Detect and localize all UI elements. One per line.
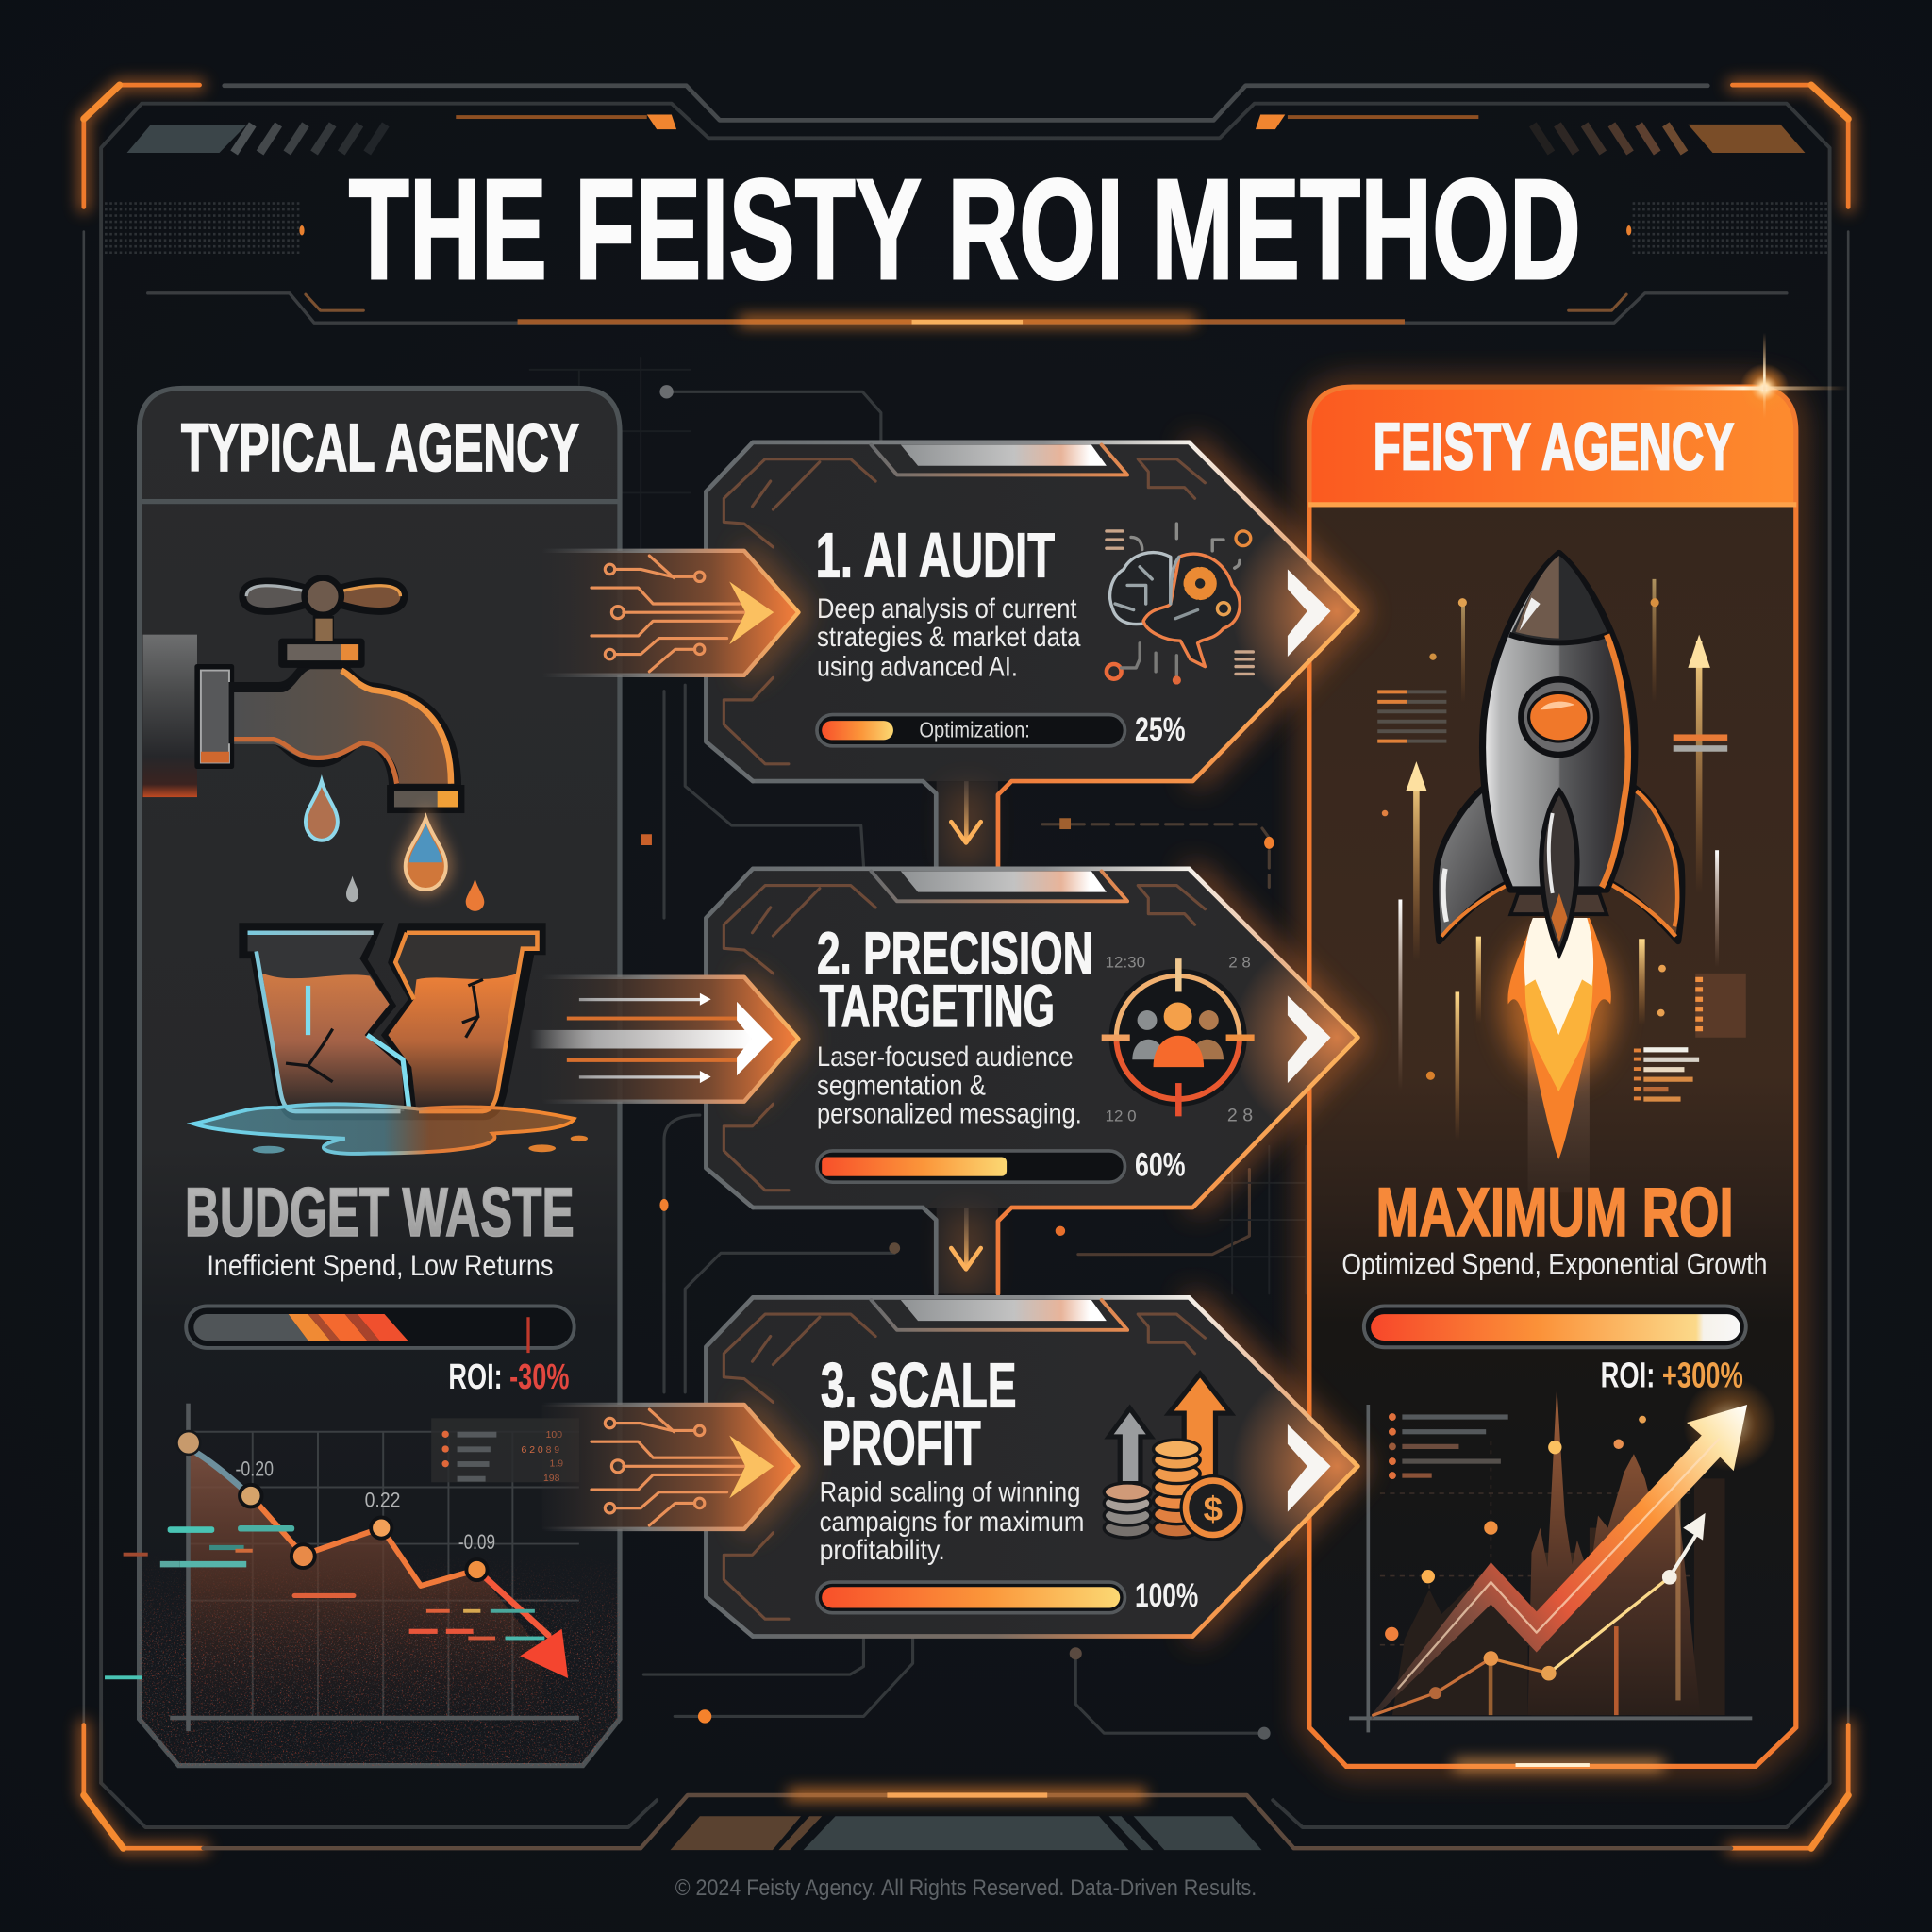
heading xyxy=(817,921,1093,1040)
roi: +300%: ROI: +300% xyxy=(1601,1357,1743,1396)
roi: -30%: ROI: -30% xyxy=(448,1357,569,1397)
icon: audience target: 12 0 xyxy=(1106,1108,1137,1125)
connector arrow 2 xyxy=(530,977,798,1102)
icon: audience target: 2 8 xyxy=(1228,953,1251,971)
icon: coins and growth arrows: $ xyxy=(1204,1490,1223,1528)
heading: feisty agency: FEISTY AGENCY xyxy=(1374,409,1734,484)
icon: coins and growth arrows xyxy=(1104,1374,1246,1541)
heading: TARGETING xyxy=(820,974,1055,1040)
description xyxy=(817,1041,1082,1130)
description: Deep analysis of current xyxy=(817,593,1077,625)
line chart: declining returns: -0.20 xyxy=(235,1457,274,1481)
heading: 2. PRECISION xyxy=(817,921,1093,987)
description xyxy=(817,593,1081,682)
step panel 1: ai audit xyxy=(706,442,1357,868)
bottom hazard blocks xyxy=(671,1816,1261,1850)
icon: cracked bucket xyxy=(242,926,542,1116)
description: profitability. xyxy=(820,1535,945,1566)
panel body xyxy=(140,388,620,1766)
line chart: declining returns xyxy=(105,1404,641,1787)
data readout box: 198 xyxy=(543,1474,560,1484)
icon: water drops xyxy=(306,781,484,911)
heading xyxy=(821,1352,1017,1478)
description: campaigns for maximum xyxy=(820,1507,1084,1538)
title underline xyxy=(148,293,1787,325)
bottom glow xyxy=(1454,1759,1663,1771)
data readout box: 100 xyxy=(546,1430,562,1441)
description: strategies & market data xyxy=(817,622,1081,653)
description: Rapid scaling of winning xyxy=(820,1477,1080,1508)
side texture strips xyxy=(105,204,1830,253)
panel: feisty agency xyxy=(1308,333,1848,1771)
header band xyxy=(1309,387,1796,504)
value 25%: 25% xyxy=(1135,711,1185,748)
label: maximum roi: MAXIMUM ROI xyxy=(1376,1174,1734,1251)
rising arrows xyxy=(1382,579,1719,1140)
icon: ai brain xyxy=(1107,524,1253,685)
progress bar: maximum roi xyxy=(1364,1306,1746,1347)
value 100%: 100% xyxy=(1135,1577,1198,1614)
description: Laser-focused audience xyxy=(817,1041,1074,1073)
background circuit traces xyxy=(530,358,1312,1740)
progress bar 25%: Optimization: xyxy=(919,718,1030,742)
connector arrow 1 xyxy=(542,551,798,675)
panel divider xyxy=(140,499,620,504)
data readout box xyxy=(431,1418,579,1484)
sparkle xyxy=(1639,333,1848,419)
line chart: declining returns: -0.09 xyxy=(458,1530,495,1554)
panel: typical agency xyxy=(105,388,641,1787)
connector arrow 3 xyxy=(542,1405,798,1529)
data readout box: 1.9 xyxy=(550,1458,563,1469)
heading: PROFIT xyxy=(822,1408,981,1478)
panel border xyxy=(1309,387,1796,1766)
value 60%: 60% xyxy=(1135,1147,1185,1184)
panel body xyxy=(1309,387,1796,1766)
progress bar 25% xyxy=(817,715,1124,746)
puddle xyxy=(193,1104,588,1154)
caption: optimized spend: Optimized Spend, Exponential Growth xyxy=(1341,1248,1768,1281)
description: personalized messaging. xyxy=(817,1099,1082,1130)
icon: audience target: 12:30 xyxy=(1106,953,1145,971)
progress bar 60% xyxy=(817,1151,1124,1182)
icon: leaking faucet xyxy=(143,578,464,813)
chart: exponential growth xyxy=(1349,1377,1776,1732)
step panel 2: precision targeting xyxy=(706,869,1357,1293)
line chart: declining returns: 0.22 xyxy=(365,1488,400,1511)
icon: rocket xyxy=(1436,553,1682,1192)
description: segmentation & xyxy=(817,1070,986,1101)
mini data lists xyxy=(1377,690,1746,1102)
icon: audience target: 2 8 xyxy=(1227,1106,1253,1126)
step panel 3: scale profit xyxy=(706,1297,1357,1637)
icon: audience target xyxy=(1102,953,1255,1126)
description: using advanced AI. xyxy=(817,651,1018,682)
caption: inefficient spend: Inefficient Spend, Low Returns xyxy=(207,1249,553,1282)
heading: 3. SCALE xyxy=(821,1352,1017,1422)
label: budget waste: BUDGET WASTE xyxy=(185,1174,575,1251)
progress bar 100% xyxy=(817,1582,1124,1613)
data readout box: 6 2 0 8 9 xyxy=(521,1445,559,1456)
description xyxy=(820,1477,1084,1566)
heading: typical agency: TYPICAL AGENCY xyxy=(181,410,579,486)
footer note: © 2024 Feisty Agency. All Rights Reserved. Data-Driven Results. xyxy=(675,1875,1257,1901)
top hazard blocks xyxy=(127,114,1805,153)
panel glow xyxy=(1309,387,1796,1766)
progress bar: budget waste xyxy=(186,1306,575,1353)
heading: 1. AI AUDIT xyxy=(816,521,1055,591)
